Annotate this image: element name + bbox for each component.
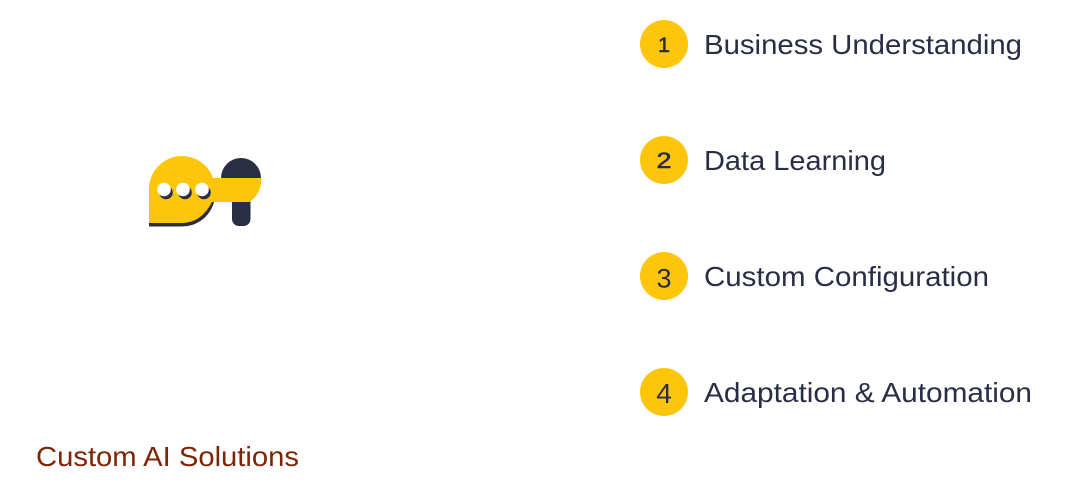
step 2: data learning: Data Learning — [704, 145, 886, 176]
step 2: data learning — [640, 136, 886, 184]
step 3: custom configuration — [640, 252, 989, 300]
step 2: data learning: 2 — [656, 148, 672, 173]
step 4: adaptation and automation: 4 — [656, 378, 672, 409]
step 4: adaptation and automation — [640, 368, 1032, 416]
step 4: adaptation and automation: Adaptation & Automation — [704, 377, 1032, 408]
step 3: custom configuration: 3 — [656, 264, 672, 294]
caption: Custom AI Solutions — [36, 441, 299, 472]
step 1: business understanding: Business Understanding — [704, 29, 1022, 60]
step 1: business understanding: 1 — [658, 34, 670, 57]
step 1: business understanding — [640, 20, 1022, 68]
step 3: custom configuration: Custom Configuration — [704, 261, 989, 292]
icon: speech bubble and microphone — [149, 156, 262, 227]
